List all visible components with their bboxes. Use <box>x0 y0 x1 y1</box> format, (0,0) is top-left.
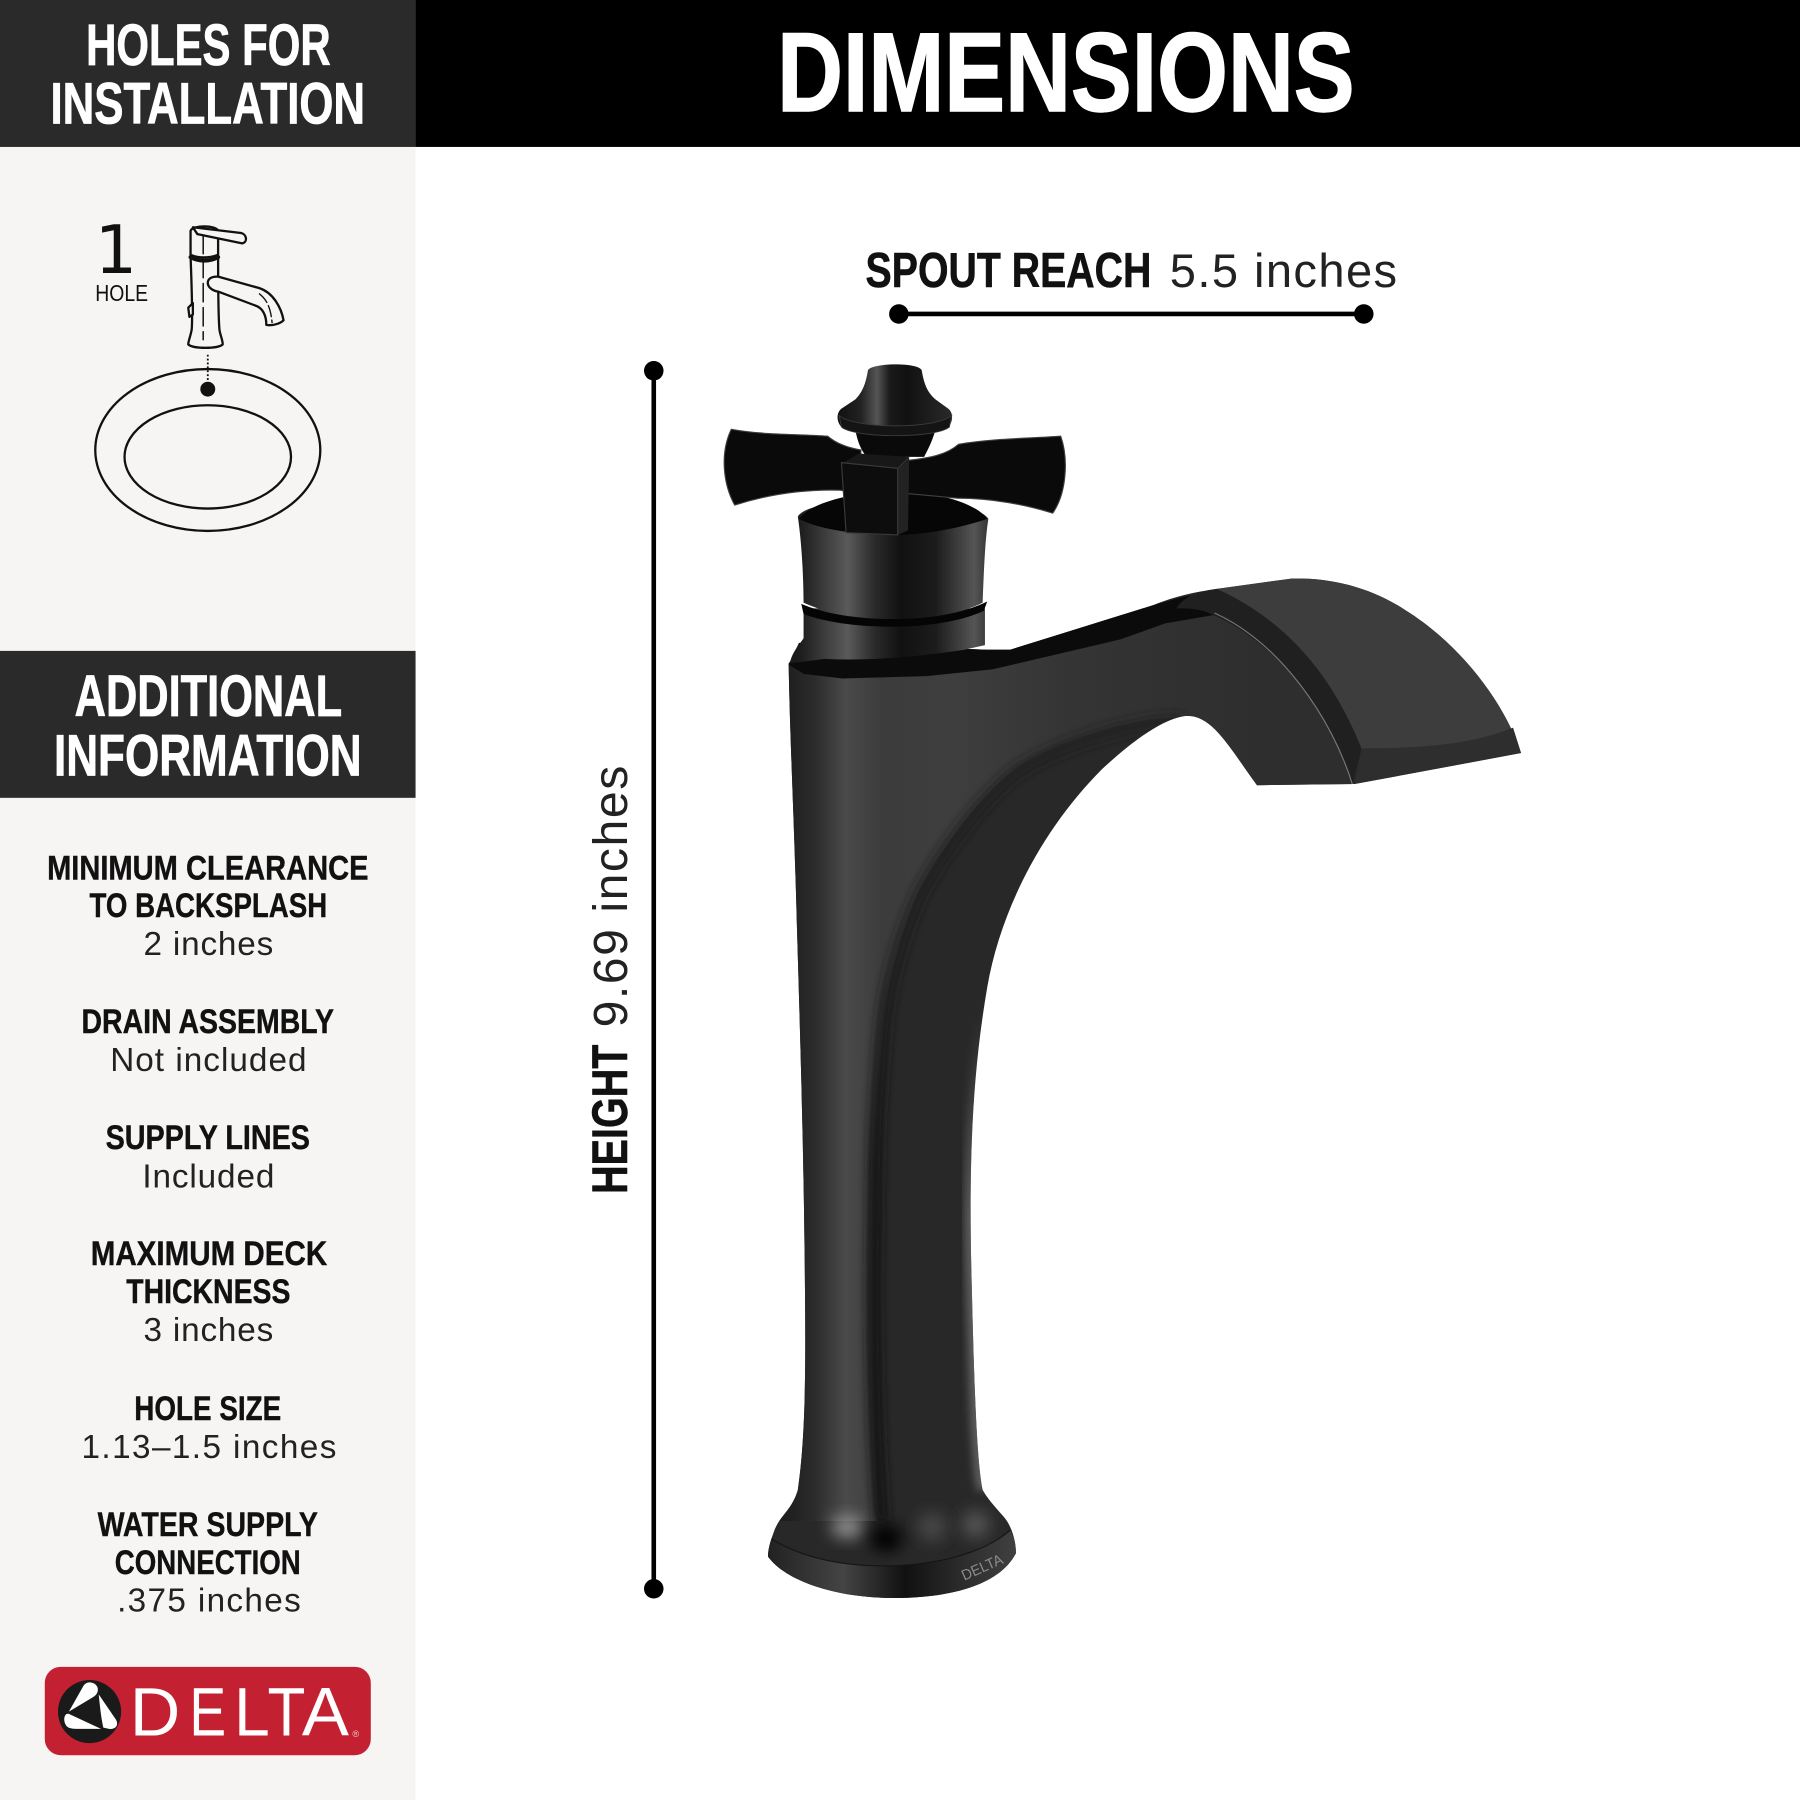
spec: drain assembly <box>82 1003 334 1079</box>
heading: additional information <box>0 651 416 798</box>
logo: delta <box>45 1667 371 1755</box>
label: spout reach <box>866 243 1397 298</box>
handle arm right <box>908 436 1065 513</box>
spec: supply lines: SUPPLY LINES <box>106 1119 310 1157</box>
spec: minimum clearance: MINIMUM CLEARANCE <box>47 849 368 887</box>
spec: water supply connection: .375 inches <box>117 1583 301 1620</box>
cup <box>798 500 988 619</box>
handle arm left <box>724 429 861 505</box>
handle block top <box>841 453 909 468</box>
panel: left sidebar <box>0 0 416 1800</box>
logo: delta: T <box>267 1674 305 1751</box>
dimension line: spout reach <box>889 304 1374 324</box>
heading: additional information: INFORMATION <box>54 723 362 788</box>
spec: maximum deck thickness: MAXIMUM DECK <box>91 1235 327 1273</box>
handle block side <box>898 457 909 535</box>
spec: hole size: 1.13–1.5 inches <box>82 1429 336 1466</box>
spec: minimum clearance <box>47 849 368 963</box>
knob ring <box>839 416 952 436</box>
label: height: HEIGHT <box>581 1045 638 1194</box>
spec: drain assembly: DRAIN ASSEMBLY <box>82 1003 334 1041</box>
icon: one hole count: 1 <box>95 211 137 289</box>
logo: delta: E <box>189 1674 226 1751</box>
cup opening <box>799 491 987 535</box>
spec: minimum clearance: TO BACKSPLASH <box>90 887 327 925</box>
icon: line-art faucet <box>188 226 284 348</box>
spec: maximum deck thickness <box>91 1235 327 1349</box>
heading: additional information: ADDITIONAL <box>75 664 342 729</box>
heading: holes for installation <box>0 0 416 147</box>
spec: minimum clearance: 2 inches <box>143 926 273 963</box>
knob top <box>838 364 952 436</box>
spec: hole size: HOLE SIZE <box>134 1390 281 1428</box>
spec: maximum deck thickness: 3 inches <box>143 1312 273 1349</box>
icon: oval sink with hole <box>95 369 320 531</box>
label: height: 9.69 inches <box>584 766 638 1027</box>
faucet body and spout <box>758 578 1521 1598</box>
logo: delta: A <box>302 1674 349 1751</box>
spec: drain assembly: Not included <box>110 1042 307 1079</box>
dimension line: height <box>644 361 664 1599</box>
faucet base highlights: DELTA <box>959 1551 1006 1584</box>
product photo: matte black faucet <box>724 364 1521 1601</box>
icon: one hole count: HOLE <box>95 280 148 306</box>
label: spout reach: 5.5 inches <box>1170 244 1397 297</box>
spec: maximum deck thickness: THICKNESS <box>126 1273 290 1311</box>
label: height <box>581 766 638 1194</box>
spec: water supply connection: CONNECTION <box>115 1544 301 1582</box>
spout end facet <box>1217 578 1521 753</box>
icon: dotted guide line <box>207 355 209 382</box>
label: spout reach: SPOUT REACH <box>866 243 1151 298</box>
logo: delta: L <box>234 1674 270 1751</box>
faucet base highlights <box>763 1511 1022 1601</box>
collar ring line <box>801 602 987 627</box>
heading: holes for installation: INSTALLATION <box>51 71 365 136</box>
handle block <box>841 463 898 535</box>
title bar: dimensions <box>416 0 1800 147</box>
title bar: dimensions: DIMENSIONS <box>777 9 1355 135</box>
heading: holes for installation: HOLES FOR <box>86 13 331 78</box>
icon: one hole count <box>95 211 148 306</box>
spec: supply lines: Included <box>142 1159 274 1196</box>
knob stem <box>855 429 936 457</box>
collar <box>790 608 985 664</box>
logo: delta: D <box>130 1674 180 1751</box>
spec: water supply connection <box>98 1506 318 1620</box>
spec: supply lines <box>106 1119 310 1196</box>
spec: water supply connection: WATER SUPPLY <box>98 1506 318 1544</box>
logo: delta: ® <box>352 1729 359 1739</box>
spec: hole size <box>82 1390 336 1466</box>
